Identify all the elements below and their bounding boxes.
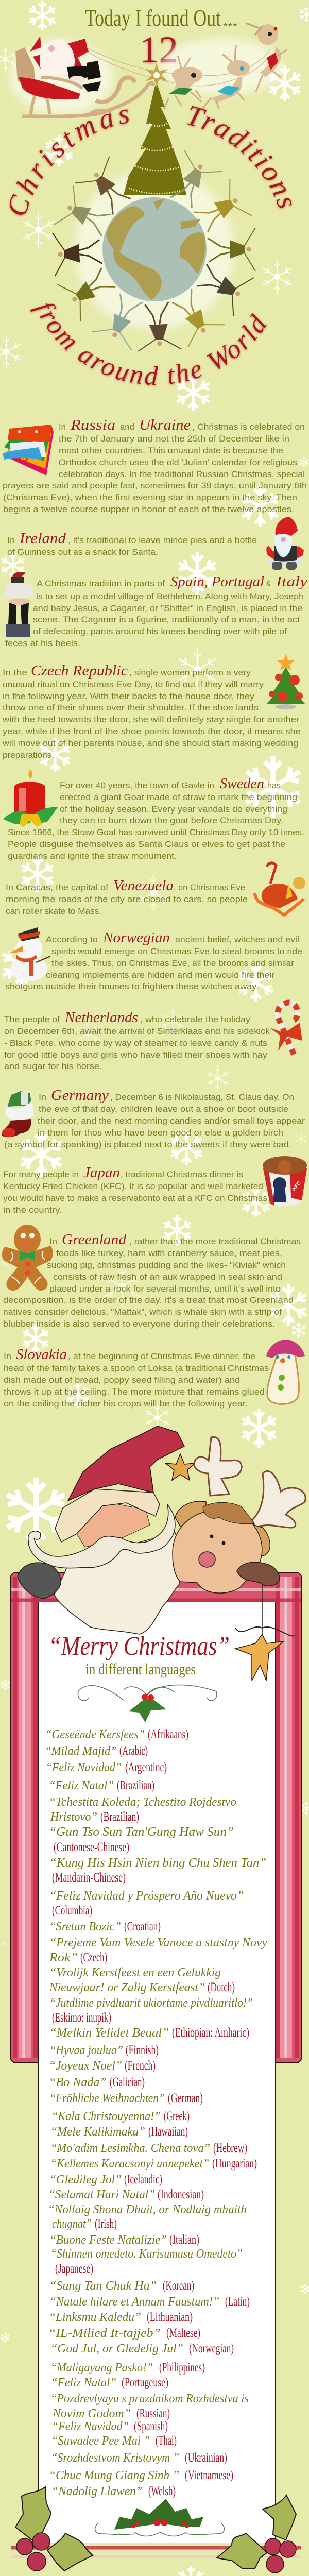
text block: In Caracas, the capital of bbox=[6, 883, 108, 892]
reindeer eyes bbox=[210, 1534, 226, 1545]
list of greetings: (Brazilian) bbox=[117, 1778, 154, 1792]
reindeer hair tuft bbox=[203, 1502, 254, 1524]
text block: Russia bbox=[70, 417, 115, 433]
list of greetings: (Latin) bbox=[225, 2295, 250, 2309]
list of greetings: “Feliz Natal” bbox=[51, 2376, 116, 2389]
text block: the skies. Thus, on Christmas Eve, all the brooms and similar bbox=[52, 959, 295, 968]
white card bbox=[39, 1602, 275, 2543]
icon: decorated tree bbox=[267, 654, 305, 709]
text block: , on Christmas Eve bbox=[174, 883, 245, 892]
list of greetings: (Hungarian) bbox=[212, 2157, 257, 2171]
list of greetings: (Portugeuse) bbox=[122, 2376, 168, 2389]
hat star bbox=[165, 1454, 195, 1480]
list of greetings: (Russian) bbox=[136, 2406, 170, 2420]
list of greetings: (Lithuanian) bbox=[147, 2310, 193, 2324]
text block bbox=[4, 1087, 305, 1149]
text block: prayers are said and people fast, sometimes for 39 days, until January 6th bbox=[3, 481, 307, 490]
text block: in the country. bbox=[3, 1206, 62, 1215]
text block: sucking pig, christmas pudding and the likes- "Kiviak" which bbox=[47, 1261, 286, 1270]
list of greetings: chugnat” bbox=[52, 2217, 92, 2231]
list of greetings: “Tchestita Koleda; Tchestito Rojdestvo bbox=[49, 1795, 236, 1809]
list of greetings bbox=[45, 1727, 267, 2498]
list of greetings: “Sretan Bozic” bbox=[49, 1920, 121, 1934]
text block: People disguise themselves as Santa Claus or elves to get past the bbox=[8, 840, 285, 849]
text block: and bbox=[120, 422, 134, 432]
text block: In bbox=[7, 536, 15, 545]
heading: from around the World: from around the World bbox=[29, 302, 268, 387]
list of greetings: “Melkin Yelidet Beaal” bbox=[49, 2026, 169, 2040]
text block: (Christmas Eve), when the first evening star in appears in the sky. Then bbox=[3, 493, 297, 502]
text block: , single women perform a very bbox=[129, 668, 251, 677]
ornament: holly sprig top bbox=[78, 1685, 217, 1722]
list of greetings: “Feliz Navidad” bbox=[52, 2420, 129, 2433]
list of greetings: (Spanish) bbox=[134, 2419, 168, 2433]
icon: KFC bucket bbox=[263, 1156, 307, 1206]
tradition: Slovakia bbox=[4, 1340, 305, 1409]
frame corner: right holly and berries bbox=[217, 2495, 296, 2573]
list of greetings: (Croatian) bbox=[124, 1920, 161, 1934]
text block: A Christmas tradition in parts of bbox=[37, 579, 165, 588]
text block: they can to burn down the goat before Christmas Day. bbox=[60, 816, 283, 825]
icon: caganer figurine bbox=[3, 572, 34, 637]
list of greetings: “Pozdrevlyayu s prazdnikom Rozhdestva is bbox=[50, 2392, 249, 2405]
list of greetings: “Bo Nada” bbox=[49, 2076, 107, 2089]
list of greetings: “God Jul, or Gledelig Jul” bbox=[50, 2342, 183, 2355]
tradition: Spain, Portugal and Italy bbox=[3, 572, 307, 648]
text block: placed under a rock for several months, until it's well into bbox=[49, 1284, 281, 1294]
text block: Norwegian bbox=[102, 929, 170, 946]
list of greetings: “Nollaig Shona Dhuit, or Nodlaig mhaith bbox=[48, 2203, 247, 2216]
text block: throw one of their shoes over their shoulder. If the shoe lands bbox=[3, 703, 259, 713]
list of greetings: “Feliz Navidad y Próspero Año Nuevo” bbox=[49, 1889, 244, 1903]
icon: christmas tree with star bbox=[124, 63, 186, 195]
frame corner: left holly and berries bbox=[15, 2487, 93, 2571]
text block: foods like turkey, ham with cranberry sauce, meat pies, bbox=[56, 1249, 282, 1258]
text block: guardians and ignite the straw monument. bbox=[8, 852, 177, 861]
list of greetings: “Selamat Hari Natal” bbox=[48, 2188, 155, 2201]
icon: calendar: 25 bbox=[16, 453, 28, 464]
list of greetings: “Feliz Navidad” bbox=[46, 1761, 122, 1774]
text block: ancient belief, witches and evil bbox=[175, 935, 299, 944]
text block bbox=[4, 1009, 270, 1071]
text block: is to set up a model village of Bethlehem. Along with Mary, Joseph bbox=[36, 592, 304, 601]
title: Today I found Out: Today I found Out bbox=[85, 5, 221, 31]
hanging star ornament bbox=[235, 1584, 295, 1681]
list of greetings: (Galician) bbox=[110, 2075, 145, 2089]
text block: , December 6 is Nikolaustag, St. Claus day. On bbox=[110, 1093, 294, 1102]
list of greetings: “Joyeux Noel” bbox=[49, 2059, 122, 2073]
list of greetings: (Ukrainian) bbox=[185, 2451, 227, 2465]
list of greetings: (Cantonese-Chinese) bbox=[54, 1840, 129, 1854]
text block: has bbox=[267, 781, 281, 790]
list of greetings: (Czech) bbox=[80, 1951, 107, 1964]
list of greetings: “Linksmu Kaledu” bbox=[49, 2311, 141, 2324]
tradition: Czech Republic bbox=[2, 654, 305, 760]
text block: natives consider delicious. "Mattak", which is whale skin with a strip of bbox=[3, 1308, 282, 1317]
text block: spirits would emerge on Christmas Eve to steal brooms to ride bbox=[52, 947, 302, 956]
text block: can roller skate to Mass. bbox=[6, 907, 101, 916]
list of greetings: Nieuwjaar! or Zalig Kerstfeast” bbox=[49, 1981, 205, 1994]
text block: Spain, Portugal bbox=[170, 573, 264, 590]
list of greetings: “Shinnen omedeto. Kurisumasu Omedeto” bbox=[50, 2247, 243, 2261]
list of greetings: (Japanese) bbox=[55, 2262, 93, 2276]
icon: reins bbox=[87, 47, 270, 86]
list of greetings: “Natale hilare et Annum Faustum!” bbox=[49, 2295, 219, 2309]
text block: In bbox=[59, 422, 66, 432]
text block: the eve of that day, children leave out a shoe or boot outside bbox=[39, 1105, 288, 1114]
list of greetings: (Columbia) bbox=[52, 1904, 92, 1918]
tradition: Venezuela bbox=[6, 863, 305, 916]
icon: snowman bbox=[8, 927, 50, 981]
icon: skaters around the globe bbox=[53, 150, 255, 351]
list of greetings: (Hebrew) bbox=[213, 2141, 247, 2155]
text block: consists of raw flesh of an auk wrapped in seal skin and bbox=[53, 1273, 282, 1282]
icon: gingerbread man bbox=[2, 1225, 53, 1291]
icon: candle with holly bbox=[3, 769, 58, 827]
text block: Italy bbox=[276, 573, 307, 590]
list of greetings: (Greek) bbox=[164, 2109, 190, 2123]
number 12: 12 bbox=[140, 29, 178, 70]
text block: begins a twelve course supper in honor of each of the twelve apostles. bbox=[3, 505, 294, 514]
text block bbox=[3, 417, 307, 514]
list of greetings: “Kellemes Karacsonyi unnepeket” bbox=[50, 2157, 209, 2171]
text block: Venezuela bbox=[113, 877, 174, 894]
list of greetings: “IL-Milied It-tajjeb” bbox=[48, 2327, 161, 2340]
icon: globe bbox=[102, 197, 207, 301]
text block: According to bbox=[46, 935, 98, 944]
icon: snowman cookie bbox=[266, 1340, 305, 1404]
panel: Merry Christmas in different languages bbox=[10, 1426, 305, 2573]
list of greetings: “Kung His Hsin Nien bing Chu Shen Tan” bbox=[49, 1856, 266, 1870]
list of greetings: “Nadolig Llawen” bbox=[52, 2485, 143, 2498]
list of greetings: Hristovo” bbox=[50, 1810, 97, 1824]
list of greetings: (Mandarin-Chinese) bbox=[52, 1871, 126, 1885]
text block: most other countries. This unusual date is because the bbox=[59, 446, 283, 455]
santa beard bbox=[54, 1533, 179, 1634]
tradition: Germany bbox=[2, 1087, 305, 1149]
list of greetings: (Welsh) bbox=[148, 2484, 176, 2498]
red plaid frame bbox=[10, 1572, 302, 2557]
text block: & bbox=[266, 579, 271, 588]
hero illustration panel bbox=[6, 5, 294, 387]
text block bbox=[3, 1164, 267, 1215]
list of greetings: (Norwegian) bbox=[189, 2342, 234, 2355]
text block: feces at his heels. bbox=[5, 639, 80, 648]
list of greetings: (Finnish) bbox=[126, 2043, 159, 2057]
text block: Netherlands bbox=[64, 1009, 138, 1026]
list of greetings: (Philippines) bbox=[159, 2361, 205, 2375]
list of greetings: (Brazilian) bbox=[100, 1810, 139, 1824]
icon: santa in sleigh bbox=[15, 36, 153, 116]
text block: Greenland bbox=[62, 1231, 127, 1248]
text block bbox=[8, 775, 304, 861]
list of greetings: (Irish) bbox=[95, 2217, 117, 2231]
list of greetings: “Srozhdestvom Kristovym ” bbox=[51, 2451, 179, 2465]
list of greetings: “Geseënde Kersfees” bbox=[45, 1728, 145, 1741]
text block: blubber inside is also served to everyone during their celebrations. bbox=[3, 1319, 275, 1329]
text block: with the heel towards the door, she will definitely stay single for another bbox=[2, 715, 300, 724]
ornament: holly sprig bottom bbox=[95, 2499, 224, 2536]
list of greetings: “Mo'adim Lesimkha. Chena tova” bbox=[50, 2142, 210, 2155]
text block: and baby Jesus, a Caganer, or "Shitter" in English, is placed in the bbox=[33, 604, 302, 613]
list of greetings: (Arabic) bbox=[119, 1744, 148, 1758]
icon: reindeer with green saddle bbox=[164, 56, 202, 109]
icon: candy cane with bow bbox=[270, 1003, 302, 1056]
list of greetings: (Indonesian) bbox=[158, 2188, 204, 2201]
list of greetings: “Vrolijk Kerstfeest en een Gelukkig bbox=[49, 1966, 221, 1979]
list of greetings: (Thai) bbox=[156, 2434, 177, 2448]
santa face bbox=[77, 1503, 150, 1547]
text block: (a symbol for spanking) is placed next to the sweets if they were bad. bbox=[4, 1140, 291, 1149]
text block: of defecating, pants around his knees bending over with pile of bbox=[33, 627, 287, 636]
list of greetings: “Fröhliche Weihnachten” bbox=[49, 2092, 165, 2105]
list of greetings: “Prejeme Vam Vesele Vanoce a stastny Novy bbox=[49, 1936, 267, 1950]
text block: on the ceiling the richer his crops will be the following year. bbox=[4, 1399, 248, 1409]
icon: santa bbox=[266, 517, 304, 570]
list of greetings: “Maligayang Pasko!” bbox=[50, 2361, 153, 2375]
text block: , traditional Christmas dinner is bbox=[121, 1170, 243, 1179]
list of greetings: “Jutdlime pivdluarit ukiortame pivdluaritlo!” bbox=[49, 1996, 253, 2010]
text block bbox=[5, 573, 307, 648]
text block: Germany bbox=[51, 1087, 109, 1104]
santa hat bbox=[68, 1426, 184, 1501]
reindeer head bbox=[173, 1510, 262, 1593]
icon: stocking with gifts bbox=[2, 1091, 34, 1137]
text block: and sugar for his horse. bbox=[4, 1062, 102, 1071]
icon: KFC bucket: KFC bbox=[291, 1180, 303, 1192]
list of greetings: (Hawaiian) bbox=[148, 2125, 188, 2139]
list of greetings: (Argentine) bbox=[125, 1760, 167, 1774]
list of greetings: (Vietnamese) bbox=[185, 2468, 233, 2482]
reindeer paw bbox=[237, 1562, 280, 1586]
title: Today I found Out: *** bbox=[223, 21, 237, 32]
text block: For over 40 years, the town of Gavle in bbox=[60, 781, 214, 790]
list of greetings: (Korean) bbox=[163, 2279, 194, 2293]
list of greetings: “Sung Tan Chuk Ha” bbox=[49, 2279, 157, 2293]
text block: In bbox=[4, 1352, 11, 1361]
text block: you would have to make a reservationto eat at a KFC on Christmas bbox=[3, 1194, 267, 1203]
list of greetings: “Gledileg Jol” bbox=[49, 2173, 122, 2187]
text block: for good little boys and girls who have filled their shoes with hay bbox=[4, 1050, 268, 1060]
list of greetings: “Hyvaa joulua” bbox=[49, 2044, 123, 2057]
text block: Slovakia bbox=[16, 1346, 67, 1363]
text block: Ireland bbox=[19, 530, 66, 547]
list of greetings: (Ethiopian: Amharic) bbox=[172, 2026, 249, 2040]
text block: unusual ritual on Christmas Eve Day, to find out if they will marry bbox=[3, 680, 264, 689]
santa hat fur trim bbox=[55, 1489, 160, 1542]
soft glow behind artwork bbox=[10, 39, 283, 329]
heading: Traditions: Traditions bbox=[186, 105, 294, 210]
text block: of Guinness out as a snack for Santa. bbox=[7, 548, 158, 557]
list of greetings: “Sawadee Pee Mai ” bbox=[52, 2434, 150, 2448]
text block: Sweden bbox=[220, 775, 264, 792]
text block bbox=[2, 663, 301, 760]
reindeer antlers bbox=[194, 1437, 305, 1528]
santa moustache bbox=[28, 1504, 175, 1568]
list of greetings: (Dutch) bbox=[208, 1980, 235, 1994]
tradition: Netherlands bbox=[4, 1003, 302, 1071]
heading: Merry Christmas: “Merry Christmas” bbox=[48, 1632, 230, 1661]
reindeer nose bbox=[199, 1552, 215, 1567]
list of greetings: “Kala Christouyenna!” bbox=[52, 2110, 161, 2123]
list of greetings: (Eskimo: inupik) bbox=[52, 2011, 111, 2025]
list of greetings: “Milad Majid” bbox=[45, 1744, 117, 1758]
text block: Ukraine bbox=[139, 417, 191, 433]
text block: scene. The Caganer is a figurine, traditionally of a man, in the act bbox=[33, 615, 300, 624]
text block bbox=[4, 1346, 269, 1409]
text block: Czech Republic bbox=[31, 663, 128, 679]
list of greetings: (Icelandic) bbox=[124, 2173, 162, 2187]
text block: head of the family takes a spoon of Loksa (a traditional Christmas bbox=[4, 1364, 269, 1373]
list of greetings: (Italian) bbox=[169, 2233, 199, 2247]
text block: will move out of her parents house, and she should start making wedding bbox=[2, 739, 298, 748]
text block: shotguns outside their houses to frighten these witches away. bbox=[5, 982, 259, 991]
text block: Kentucky Fried Chicken (KFC). It is so popular and well marketed bbox=[3, 1182, 263, 1191]
list of greetings: “Buone Feste Natalizie” bbox=[49, 2233, 167, 2247]
text block: decomposition, is the order of the day. It's a treat that most Greenland bbox=[3, 1296, 294, 1305]
list of greetings: Novim Godom” bbox=[52, 2407, 131, 2420]
text block bbox=[3, 1231, 301, 1329]
list of greetings: (Maltese) bbox=[166, 2326, 200, 2340]
text block: , it's traditional to leave mince pies and a bottle bbox=[68, 536, 257, 545]
text block bbox=[5, 929, 302, 991]
subheading: in different languages: in different languages bbox=[85, 1660, 196, 1678]
text block: preparations. bbox=[3, 751, 54, 760]
text block: Orthodox church uses the old 'Julian' calendar for religious bbox=[59, 458, 297, 467]
text block: The people of bbox=[4, 1015, 60, 1024]
text block bbox=[6, 877, 248, 916]
text block: - Black Pete, who come by way of steamer to leave candy & nuts bbox=[4, 1039, 267, 1048]
text block: In the bbox=[3, 668, 27, 677]
text block: In bbox=[39, 1093, 46, 1102]
list of greetings: “Gun Tso Sun Tan'Gung Haw Sun” bbox=[49, 1825, 234, 1839]
text block bbox=[7, 530, 257, 557]
list of greetings: “Feliz Natal” bbox=[49, 1779, 114, 1792]
text block: , who celebrate the holiday bbox=[140, 1015, 251, 1024]
text block: their door, and the next morning candies and/or small toys appear bbox=[38, 1116, 305, 1126]
text block: year, while if the front of the shoe points towards the door, it means she bbox=[3, 727, 301, 736]
list of greetings: “Mele Kalikimaka” bbox=[50, 2125, 145, 2139]
text block: dish made out of bread, poppy seed filling and water) and bbox=[4, 1376, 240, 1385]
icon: calendar bbox=[3, 425, 54, 476]
icon: reindeer with blue saddle bbox=[202, 45, 250, 109]
text block: In bbox=[49, 1237, 57, 1246]
tradition: Greenland bbox=[2, 1225, 301, 1329]
tradition: Russia and Ukraine bbox=[3, 417, 307, 514]
tradition: Norway bbox=[5, 927, 302, 991]
list of greetings: Rok” bbox=[49, 1951, 78, 1964]
list of greetings: (German) bbox=[168, 2091, 203, 2105]
text block: , rather than the more traditional Christmas bbox=[129, 1237, 301, 1246]
text block: in them for thos who have been good or else a golden birch bbox=[38, 1128, 283, 1138]
text block: celebration days. In the traditional Russian Christmas, special bbox=[59, 470, 305, 479]
icon: sleigh with candy bbox=[255, 863, 305, 915]
text block: erected a giant Goat made of straw to mark the beginning bbox=[60, 793, 297, 802]
text block: on December 6th, await the arrival of Sinterklaas and his sidekick bbox=[4, 1027, 270, 1036]
list of greetings: (Afrikaans) bbox=[148, 1727, 188, 1741]
icon: lead reindeer with red saddle bbox=[246, 23, 287, 92]
text block: of the holiday season. Every year vandals do everything bbox=[60, 805, 287, 814]
text block: the 7th of January and not the 25th of December like in bbox=[59, 434, 289, 444]
text block: Since 1966, the Straw Goat has survived until Christmas Day only 10 times. bbox=[8, 828, 304, 837]
list of greetings: (French) bbox=[125, 2059, 156, 2073]
mitten bbox=[18, 1563, 61, 1599]
reindeer ears bbox=[175, 1501, 270, 1556]
tradition: Japan bbox=[3, 1156, 307, 1215]
tradition: Ireland bbox=[7, 517, 304, 570]
text block: , at the beginning of Christmas Eve dinner, the bbox=[68, 1352, 255, 1361]
illustration: santa and reindeer bbox=[18, 1426, 305, 1634]
text block: Japan bbox=[83, 1164, 120, 1181]
text block: For many people in bbox=[3, 1170, 79, 1179]
text block: cleaning implements are hidden and men would fire their bbox=[46, 971, 275, 980]
heading: Christmas: Christmas bbox=[8, 108, 130, 217]
text block: , Christmas is celebrated on bbox=[192, 422, 305, 432]
tradition: Sweden bbox=[3, 769, 304, 861]
text block: throws it up at the ceiling. The more mixture that remains glued bbox=[4, 1387, 265, 1397]
list of greetings: “Chuc Mung Giang Sinh ” bbox=[49, 2469, 179, 2482]
text block: morning the roads of the city are closed to cars, so people bbox=[6, 895, 248, 904]
text block: in the following year. With their backs to the house door, they bbox=[3, 692, 255, 701]
